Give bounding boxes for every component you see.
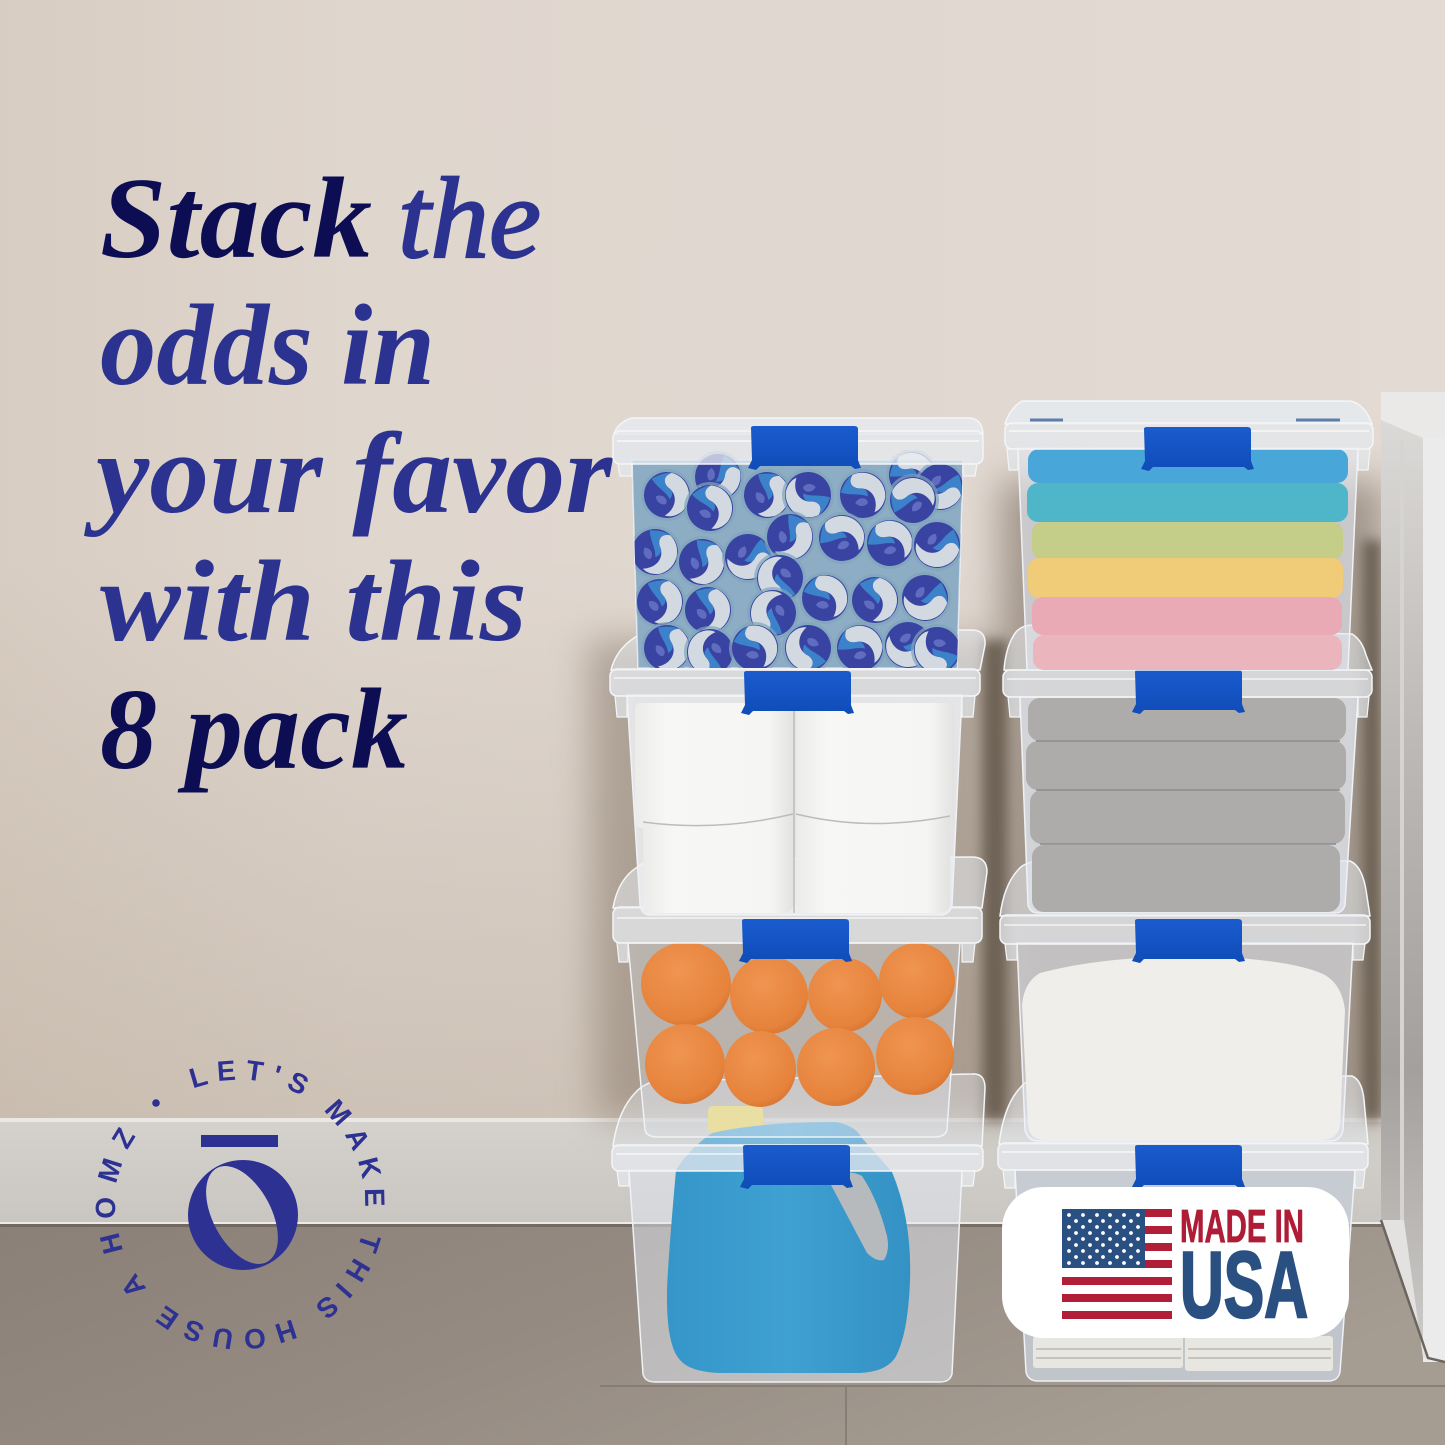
lid top surface: [1005, 401, 1372, 424]
storage box: folded white cloths: [998, 1076, 1368, 1381]
lid rim: [613, 431, 983, 464]
storage box: detergent pods: [613, 418, 983, 688]
lid rim: [1000, 915, 1370, 944]
lid rim: [1005, 423, 1373, 449]
lid rim: [1003, 670, 1372, 697]
pod tint through plastic: [632, 460, 963, 668]
heading: your favor: [83, 410, 613, 537]
lid rim: [613, 907, 982, 943]
logo bar: [201, 1135, 278, 1147]
latch: [741, 671, 854, 715]
badge: made in USA: [1002, 1187, 1349, 1338]
lid clips: [1008, 697, 1369, 717]
baseboard: [0, 1118, 1445, 1224]
storage box: laundry detergent bottle: [612, 1074, 985, 1382]
latch: [1132, 670, 1245, 714]
latch: [739, 919, 852, 963]
storage box: folded colorful towels: [1005, 401, 1373, 670]
white fabric mound: [1022, 956, 1345, 1140]
box body: [627, 695, 962, 915]
made in text: MADE IN: [1180, 1200, 1304, 1252]
box body: [628, 943, 960, 1137]
flag icon: [1062, 1209, 1172, 1319]
storage box: folded grey towels: [1003, 625, 1372, 913]
storage box: orange dryer balls: [613, 857, 987, 1137]
storage box: white fabric: [1000, 861, 1370, 1141]
latch: [748, 426, 861, 470]
circular slogan: LET'S MAKE THIS HOUSE A HOMZ: [96, 1060, 384, 1350]
shadows behind boxes: [588, 480, 1385, 1120]
lid clips: [1003, 1170, 1365, 1188]
box body: [1020, 697, 1358, 913]
lid clips: [615, 696, 975, 717]
folded cloths: [1033, 1336, 1333, 1371]
lid top surface: [613, 1074, 985, 1146]
badge background: [1002, 1187, 1349, 1338]
circular logo: [96, 1060, 384, 1350]
lid top surface: [614, 418, 983, 434]
detergent pods: [634, 450, 962, 668]
USA text: USA: [1180, 1232, 1308, 1337]
lid top surface: [999, 1076, 1368, 1144]
latch: [740, 1145, 853, 1189]
heading: the: [398, 155, 541, 282]
lid top surface: [1000, 861, 1370, 916]
logo ring: [188, 1160, 298, 1270]
box body: [1018, 448, 1358, 670]
logo dot: [152, 1099, 160, 1107]
lid clips: [617, 1171, 975, 1186]
lid rim: [612, 1145, 983, 1171]
colorful towels: [1027, 449, 1348, 670]
latch: [1132, 919, 1245, 963]
grey towels: [1026, 698, 1346, 912]
lid clips: [1005, 944, 1365, 960]
box body: [1015, 1170, 1355, 1381]
latch: [1141, 427, 1254, 471]
lid top surface: [613, 857, 987, 908]
box body: [629, 1170, 962, 1382]
floor: [0, 1224, 1445, 1445]
lid top surface: [1004, 625, 1372, 670]
lid rim: [610, 669, 980, 696]
washing machine: [1381, 392, 1445, 1362]
toilet rolls: [635, 703, 954, 913]
detergent bottle: [667, 1106, 910, 1373]
lid clips: [618, 464, 977, 476]
heading: 8 pack: [100, 666, 408, 793]
box body: [1017, 943, 1353, 1141]
lid rim: [998, 1143, 1368, 1170]
latch: [1132, 1145, 1245, 1189]
lid clips: [1007, 449, 1370, 470]
orange balls: [641, 942, 955, 1107]
storage box: toilet paper rolls: [610, 630, 985, 915]
lid clips: [617, 943, 975, 962]
box body: [632, 460, 963, 668]
heading: odds in: [100, 282, 435, 409]
heading: with this: [100, 538, 527, 665]
heading: [83, 155, 613, 793]
heading: Stack: [100, 155, 372, 282]
lid top surface: [611, 630, 985, 670]
lid corner details: [1030, 418, 1340, 422]
